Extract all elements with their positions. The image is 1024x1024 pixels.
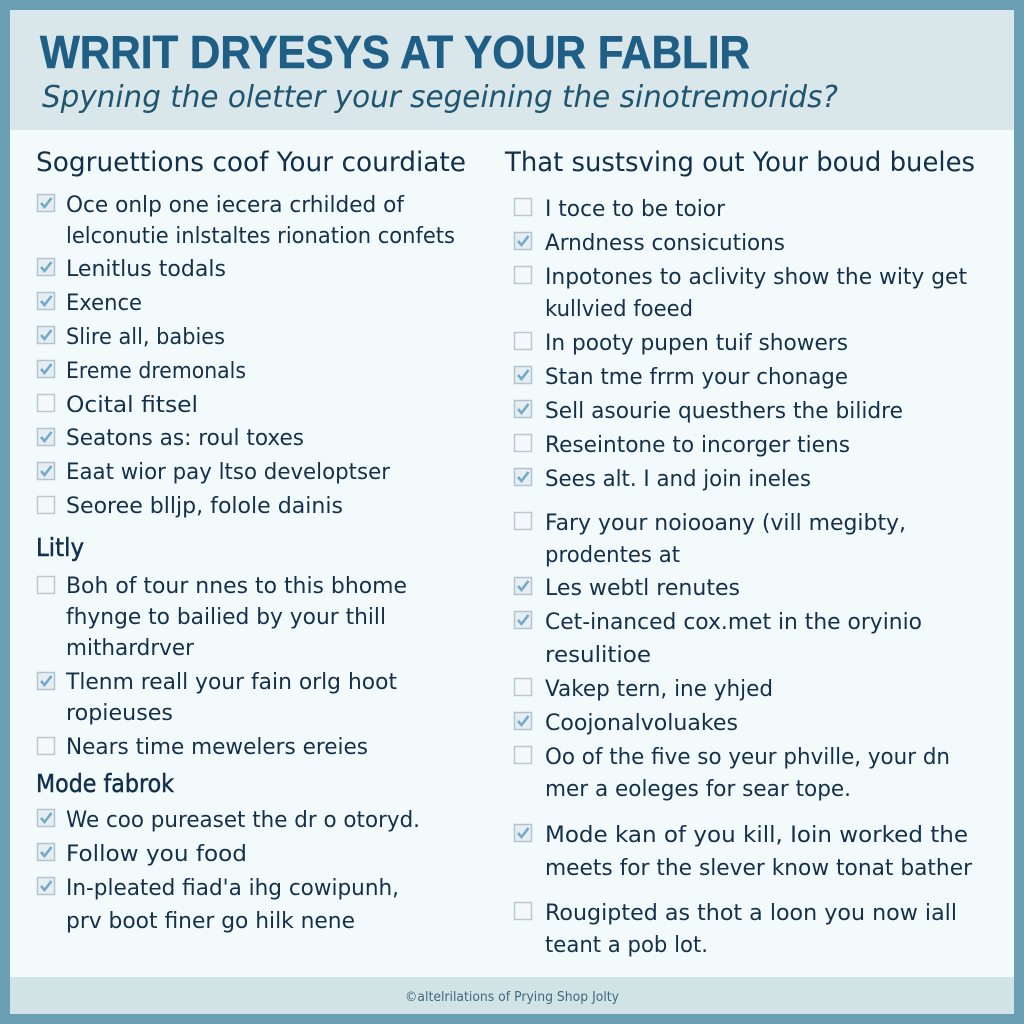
item: Vakep tern: Vakep tern, ine yhjed [545, 677, 773, 702]
item: Ocital fitsel: Ocital fitsel [66, 393, 198, 418]
item: Inpotones: Inpotones to aclivity show the wity get [545, 265, 967, 290]
item: Coojonalvoluakes: Coojonalvoluakes [545, 711, 738, 736]
left column checklist [36, 147, 466, 934]
item: Boh of tour: mithardrver [66, 636, 195, 661]
item: Mode kan: meets for the slever know tonat bather [545, 856, 973, 881]
footer band [10, 977, 1014, 1014]
left heading: Mode fabrok: Mode fabrok [36, 769, 174, 798]
item: Follow you food: Follow you food [66, 842, 247, 867]
item: Tlenm reall [38, 670, 397, 726]
item: Mode kan: Mode kan of you kill, Ioin worked the [545, 823, 968, 848]
item: Oce onlp: lelconutie inlstaltes rionation confets [66, 224, 455, 249]
item: Seoree blljp: Seoree blljp, folole dainis [66, 494, 343, 519]
item: Rougipted [514, 901, 957, 958]
title: WRRIT DRYESYS AT YOUR FABLIR [40, 26, 750, 78]
item: Inpotones: kullvied foeed [545, 297, 693, 322]
item: Oce onlp: Oce onlp one iecera crhilded of [66, 193, 405, 218]
item: Cet-inanced: resulitioe [545, 643, 651, 668]
item: In-pleated [38, 876, 399, 934]
item: Slire all: Slire all, babies [66, 325, 225, 350]
item: Mode kan [514, 823, 973, 881]
item: Ereme dremonals: Ereme dremonals [66, 359, 246, 384]
right heading: boud bueles: That sustsving out Your boud bueles [504, 147, 975, 178]
item: Lenitlus todals: Lenitlus todals [66, 257, 226, 282]
item: Fary your: Fary your noiooany (vill megibty, [545, 511, 906, 536]
header band [10, 10, 1014, 130]
item: Fary your: prodentes at [545, 543, 680, 568]
item: In-pleated: prv boot finer go hilk nene [66, 909, 355, 934]
right column checklist [504, 147, 975, 958]
item: Seatons as: Seatons as: roul toxes [66, 426, 304, 451]
item: I toce: I toce to be toior [545, 197, 726, 222]
item: Cet-inanced: Cet-inanced cox.met in the oryinio [545, 610, 922, 635]
item: In pooty: In pooty pupen tuif showers [545, 331, 848, 356]
item: Oo of the five: mer a eoleges for sear tope. [545, 777, 851, 802]
item: Boh of tour: Boh of tour nnes to this bhome [66, 574, 407, 599]
item: Oce onlp [38, 193, 455, 249]
item: Inpotones [514, 265, 967, 322]
item: Fary your [514, 511, 906, 568]
item: Oo of the five [514, 745, 950, 802]
footer credit: ©altelrilations of Prying Shop Jolty [405, 990, 619, 1005]
item: Reseintone: Reseintone to incorger tiens [545, 433, 850, 458]
item: Sell asourie: Sell asourie questhers the bilidre [545, 399, 903, 424]
item: We coo: We coo pureaset the dr o otoryd. [66, 808, 420, 833]
item: Nears time: Nears time mewelers ereies [66, 735, 368, 760]
item: Boh of tour: fhynge to bailied by your thill [66, 605, 386, 630]
item: Rougipted: Rougipted as thot a loon you now iall [545, 901, 957, 926]
item: Sees alt: Sees alt. I and join ineles [545, 467, 811, 492]
item: Tlenm reall: Tlenm reall your fain orlg hoot [65, 670, 397, 695]
item: Boh of tour [38, 574, 407, 661]
item: Cet-inanced [514, 610, 922, 668]
item: Stan tme: Stan tme frrm your chonage [545, 365, 848, 390]
item: Eaat wior: Eaat wior pay ltso developtser [66, 460, 391, 485]
left heading: Litly: Litly [36, 533, 84, 562]
item: Exence: Exence [66, 291, 142, 316]
item: Arndness: Arndness consicutions [545, 231, 785, 256]
item: Oo of the five: Oo of the five so yeur phville, your dn [545, 745, 950, 770]
item: Tlenm reall: ropieuses [66, 701, 173, 726]
item: Les webtl: Les webtl renutes [545, 576, 740, 601]
left heading: courdiate: Sogruettions coof Your courdiate [36, 147, 466, 178]
item: In-pleated: In-pleated fiad'a ihg cowipunh, [66, 876, 399, 901]
item: Rougipted: teant a pob lot. [545, 933, 708, 958]
subtitle: Spyning the oletter your segeining the sinotremorids? [42, 80, 838, 115]
